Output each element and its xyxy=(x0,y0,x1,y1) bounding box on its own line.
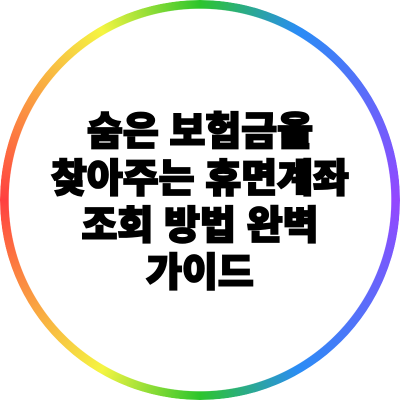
title: 조회 방법 완벽 xyxy=(82,204,318,248)
title: 가이드 xyxy=(146,252,254,294)
title: 찾아주는 휴면계좌 xyxy=(51,158,349,200)
title xyxy=(50,110,349,294)
title: 숨은 보험금을 xyxy=(87,110,313,154)
